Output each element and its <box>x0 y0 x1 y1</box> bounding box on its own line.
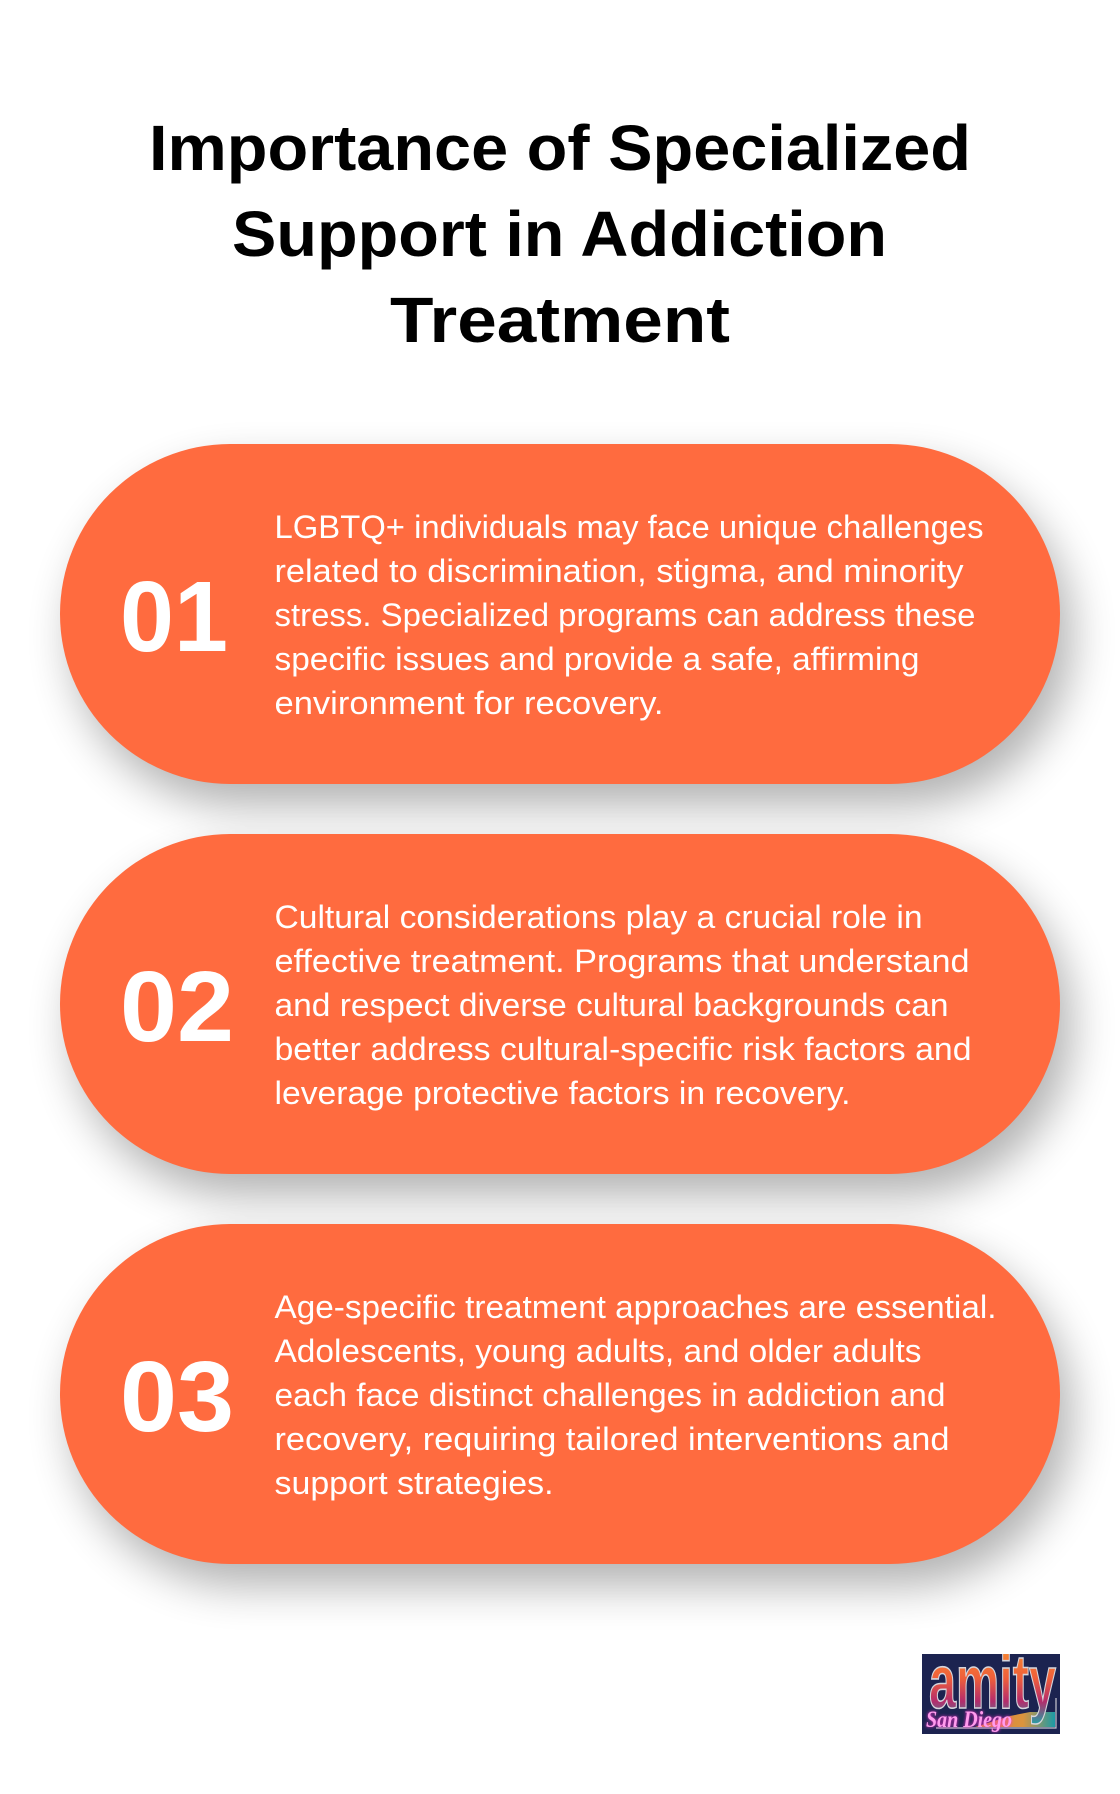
panel: card 02 cultural <box>60 834 1072 1196</box>
number 03: 03 <box>120 1341 234 1453</box>
text block: cultural considerations: and respect diverse cultural backgrounds can <box>274 987 948 1023</box>
number 02: 02 <box>120 951 234 1063</box>
text block: cultural considerations: Cultural considerations play a crucial role in <box>274 899 922 935</box>
title: Support in Addiction <box>232 198 887 270</box>
text block: age-specific approaches: recovery, requiring tailored interventions and <box>274 1421 950 1457</box>
text block: LGBTQ+ challenges: specific issues and provide a safe, affirming <box>274 641 920 677</box>
text block: age-specific approaches: each face distinct challenges in addiction and <box>274 1377 946 1413</box>
title: Treatment <box>390 284 730 356</box>
text block: cultural considerations: leverage protective factors in recovery. <box>274 1075 850 1111</box>
panel: card 01 LGBTQ+ <box>60 444 1072 806</box>
number 01: 01 <box>120 561 228 673</box>
text block: age-specific approaches <box>274 1289 996 1501</box>
logo: Amity San Diego <box>922 1654 1060 1734</box>
text block: cultural considerations <box>274 899 972 1111</box>
panel: card 03 age-specific <box>60 1224 1072 1586</box>
title: Importance of Specialized <box>149 112 971 184</box>
text block: cultural considerations: better address cultural-specific risk factors and <box>274 1031 972 1067</box>
logo: Amity San Diego: San Diego <box>926 1707 1012 1732</box>
text block: age-specific approaches: Adolescents, young adults, and older adults <box>274 1333 922 1369</box>
logo: Amity San Diego: San Diego <box>926 1707 1012 1732</box>
text block: LGBTQ+ challenges <box>274 509 984 721</box>
text block: age-specific approaches: Age-specific treatment approaches are essential. <box>274 1289 996 1325</box>
text block: LGBTQ+ challenges: related to discrimination, stigma, and minority <box>274 553 964 589</box>
text block: LGBTQ+ challenges: stress. Specialized programs can address these <box>274 597 976 633</box>
text block: LGBTQ+ challenges: environment for recovery. <box>274 685 664 721</box>
text block: cultural considerations: effective treatment. Programs that understand <box>274 943 970 979</box>
title <box>149 112 971 356</box>
text block: age-specific approaches: support strategies. <box>274 1465 554 1501</box>
text block: LGBTQ+ challenges: LGBTQ+ individuals may face unique challenges <box>274 509 984 545</box>
